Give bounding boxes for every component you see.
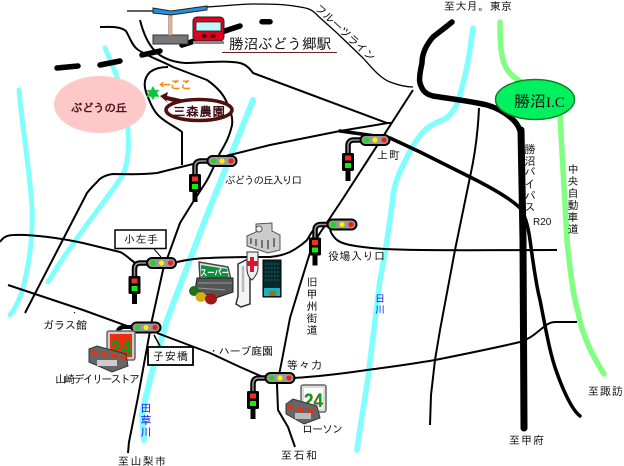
station bbox=[153, 6, 224, 44]
traffic light: yakuba bbox=[309, 220, 356, 266]
vertical label: katsunuma bypass: 勝沼バイパス bbox=[524, 143, 536, 213]
labels: 至甲府 bbox=[509, 435, 544, 446]
IC ellipse bbox=[496, 80, 574, 120]
koyasu bridge box: 子安橋 bbox=[153, 350, 188, 362]
store icon: yamazaki daily: 24 bbox=[110, 337, 132, 360]
IC ellipse: 勝沼I.C bbox=[514, 93, 565, 111]
labels: 上町 bbox=[377, 150, 400, 161]
fruit line label: フルーツライン bbox=[313, 2, 377, 64]
traffic light: budou no oka entrance bbox=[189, 156, 236, 202]
sanmori farm oval bbox=[166, 100, 232, 120]
traffic light: kozate bbox=[128, 258, 176, 304]
vertical label: old koshu road: 旧甲州街道 bbox=[306, 277, 318, 336]
budou no oka area: ぶどうの丘 bbox=[71, 102, 128, 114]
traffic light: todoroki bbox=[247, 373, 294, 419]
arrow bbox=[160, 92, 190, 105]
koyasu bridge box bbox=[148, 335, 193, 365]
labels: ぶどうの丘入り口 bbox=[225, 175, 302, 186]
river label: hikawa: 日川 bbox=[375, 294, 385, 315]
kozate box: 小左手 bbox=[124, 233, 158, 245]
store icon: lawson bbox=[286, 385, 326, 424]
sanmori farm oval: 三森農園 bbox=[173, 105, 225, 118]
thick roads bbox=[57, 22, 580, 428]
labels: R20 bbox=[533, 217, 552, 228]
labels: 至大月。東京 bbox=[444, 1, 512, 12]
supermarket icon: スーパー bbox=[200, 267, 229, 278]
labels: 等々力 bbox=[287, 360, 322, 371]
budou no oka area bbox=[54, 76, 146, 133]
supermarket icon bbox=[189, 262, 233, 304]
kozate box bbox=[115, 230, 166, 257]
labels: 山崎デイリーストア bbox=[55, 373, 140, 385]
station name: 勝沼ぶどう郷駅 bbox=[229, 36, 331, 51]
river label: tagusa: 田草川 bbox=[140, 403, 152, 438]
traffic light: kamimachi bbox=[342, 135, 390, 181]
labels: 至諏訪 bbox=[588, 386, 623, 397]
store icon: lawson: 24 bbox=[304, 391, 323, 412]
icon: green star bbox=[146, 86, 160, 100]
labels: ガラス館 bbox=[43, 319, 87, 331]
rivers bbox=[10, 28, 473, 450]
labels: ・ bbox=[70, 309, 79, 318]
expressway bbox=[500, 22, 604, 374]
hospital icon bbox=[236, 223, 280, 307]
labels: ローソン bbox=[302, 424, 343, 435]
here label: ←ここ bbox=[159, 79, 192, 91]
office building icon bbox=[263, 260, 281, 297]
labels: 役場入り口 bbox=[328, 250, 385, 262]
labels: 至石和 bbox=[281, 450, 317, 461]
labels: ・ハーブ庭園 bbox=[208, 345, 273, 357]
station underline bbox=[222, 52, 337, 54]
vertical label: chuo expressway: 中央自動車道 bbox=[568, 164, 578, 235]
traffic light: koyasu bridge bbox=[117, 322, 160, 334]
store icon: yamazaki daily bbox=[89, 331, 135, 372]
